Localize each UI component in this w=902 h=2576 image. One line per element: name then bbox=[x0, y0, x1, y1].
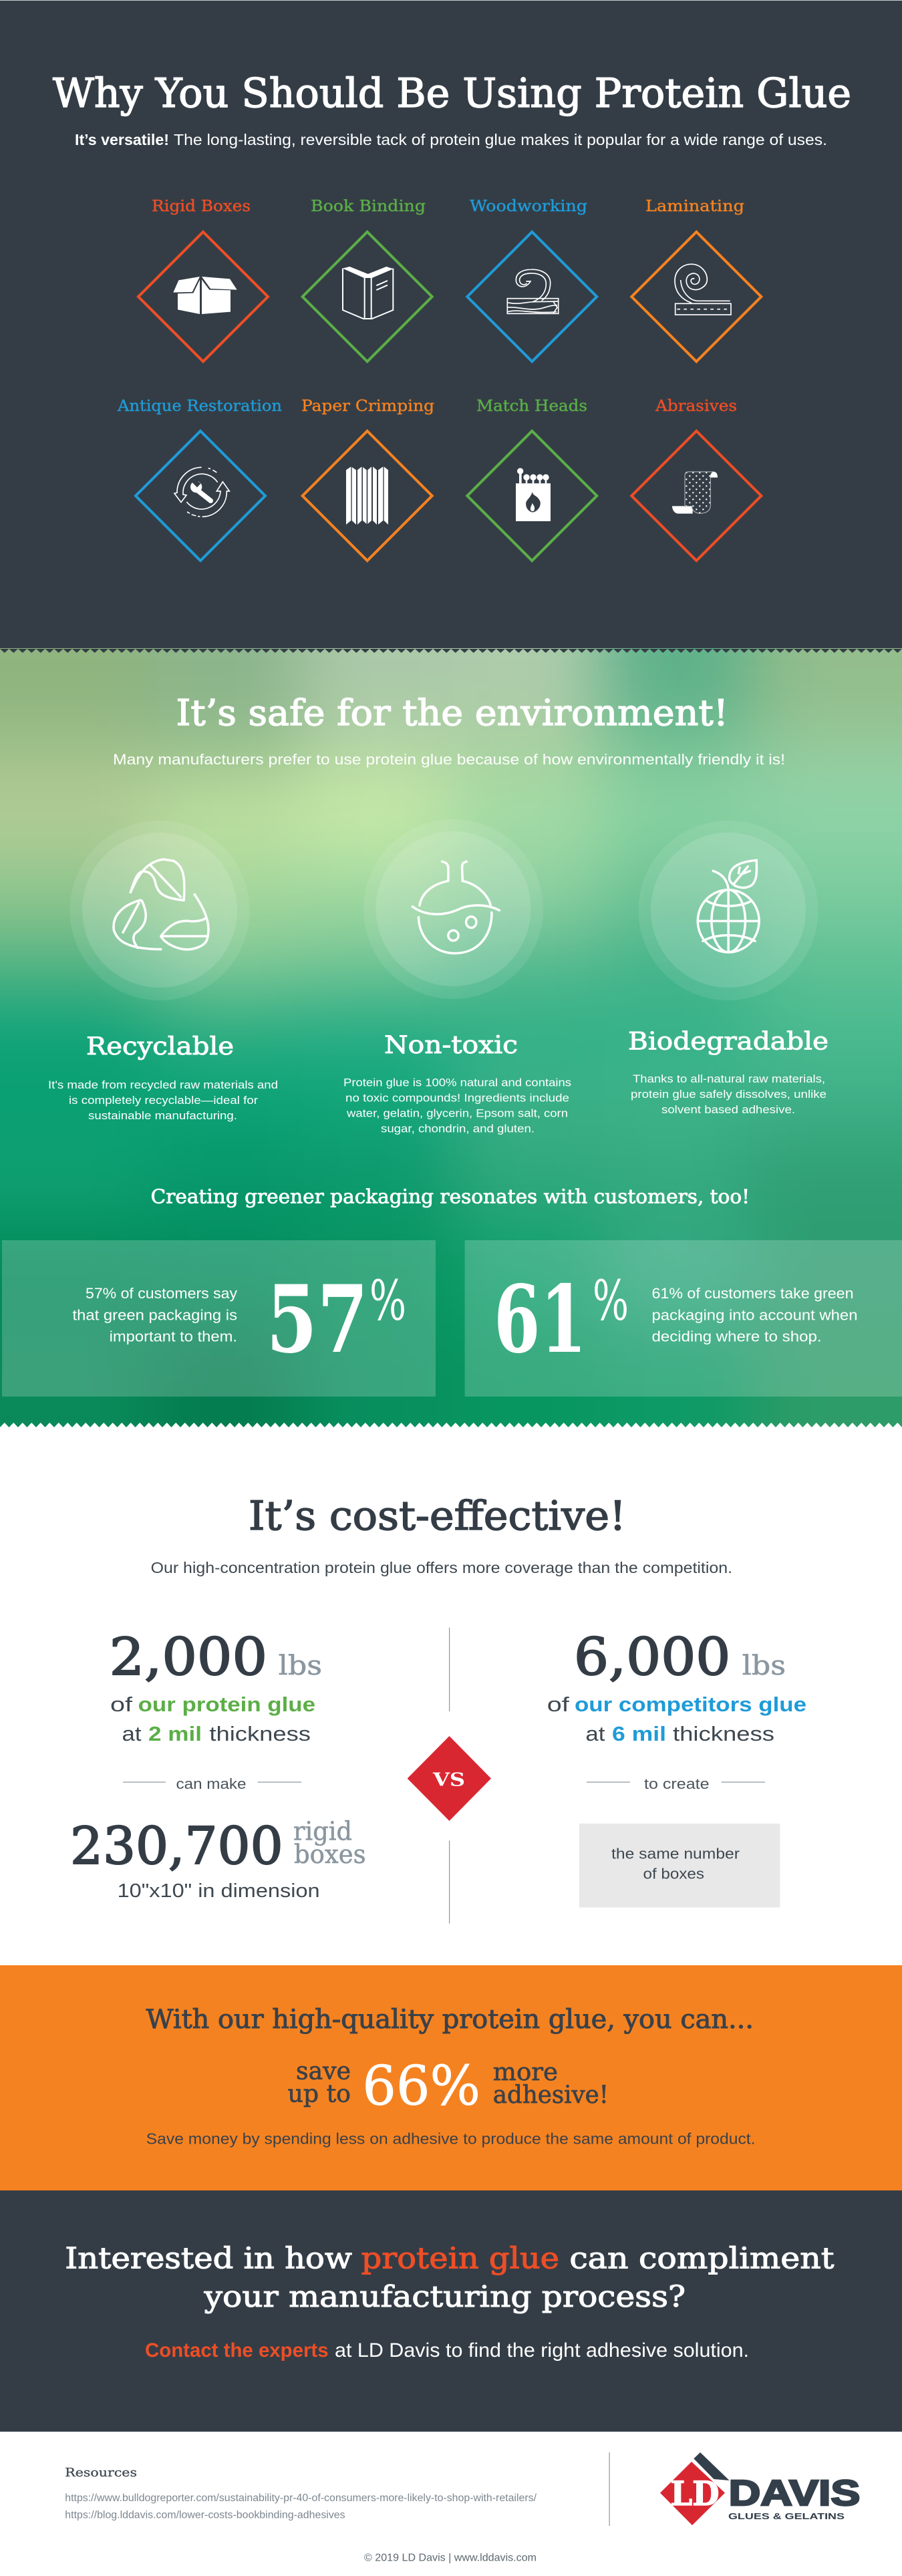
text: non-toxic: no toxic compounds! Ingredients include bbox=[345, 1092, 569, 1104]
stat panel: 61%: packaging into account when bbox=[652, 1307, 858, 1323]
use: book binding bbox=[303, 198, 432, 362]
comparison: competitor glue: thickness bbox=[673, 1722, 774, 1745]
comparison: our glue: 10"x10" in dimension bbox=[118, 1880, 320, 1902]
text: recyclable: is completely recyclable—ideal for bbox=[69, 1094, 258, 1107]
heading: safe for the environment: It’s safe for the environment! bbox=[176, 693, 728, 734]
panel: savings (orange) bbox=[0, 1965, 902, 2190]
subtitle: It’s versatile! bbox=[75, 131, 169, 148]
heading: interested: your manufacturing process? bbox=[203, 2280, 686, 2314]
use: match heads: Match Heads bbox=[476, 398, 587, 415]
heading: interested: can compliment bbox=[569, 2241, 835, 2275]
use: antique restoration bbox=[117, 398, 282, 561]
use: antique restoration: Antique Restoration bbox=[117, 398, 282, 415]
heading: biodegradable: Biodegradable bbox=[628, 1028, 829, 1056]
stat panel: 57%: % bbox=[369, 1270, 406, 1333]
use: abrasives: Abrasives bbox=[655, 398, 737, 415]
stat: save 66%: more bbox=[493, 2059, 558, 2086]
resources: Resources bbox=[65, 2466, 137, 2480]
panel: call to action (dark) bbox=[0, 2190, 902, 2432]
comparison: our glue: thickness bbox=[209, 1722, 311, 1745]
icon: globe with leaf bbox=[698, 860, 759, 952]
icon: open book bbox=[343, 267, 394, 319]
column: recyclable bbox=[48, 821, 278, 1122]
comparison: competitor glue: 6,000 bbox=[574, 1628, 730, 1687]
panel: cost-effective bbox=[0, 1427, 902, 1965]
column: non-toxic bbox=[343, 819, 571, 1135]
heading: greener packaging: Creating greener packaging resonates with customers, too! bbox=[151, 1185, 750, 1208]
badge: vs diamond: VS bbox=[432, 1769, 465, 1790]
use: abrasives bbox=[631, 398, 761, 561]
comparison: competitor glue: at bbox=[585, 1722, 605, 1745]
stat: save 66%: 66% bbox=[362, 2055, 480, 2118]
panel: environment (green blurred section) bbox=[0, 648, 902, 1427]
stat panel: 61% bbox=[465, 1240, 902, 1397]
use: laminating: Laminating bbox=[645, 198, 744, 215]
stat panel: 61%: deciding where to shop. bbox=[652, 1328, 822, 1344]
stat panel: 57%: 57 bbox=[267, 1264, 368, 1374]
panel: versatile (dark header section) bbox=[0, 0, 902, 650]
use: book binding: Book Binding bbox=[311, 198, 426, 215]
comparison: competitor glue: to create bbox=[644, 1775, 710, 1792]
text: biodegradable bbox=[631, 1072, 826, 1116]
icon: wrench and arrows bbox=[174, 467, 229, 517]
stat panel: 57%: important to them. bbox=[110, 1328, 237, 1344]
resources: https://blog.lddavis.com/lower-costs-bookbinding-adhesives bbox=[65, 2509, 345, 2521]
subheading: Our high-concentration protein glue offers more coverage than the competition. bbox=[151, 1559, 732, 1576]
logo: LD Davis: LD bbox=[670, 2474, 720, 2513]
comparison: competitor glue: of boxes bbox=[643, 1866, 704, 1882]
comparison: competitor glue: the same number bbox=[611, 1846, 740, 1862]
text: biodegradable: protein glue safely dissolves, unlike bbox=[631, 1088, 826, 1101]
text: non-toxic: water, gelatin, glycerin, Epsom salt, corn bbox=[346, 1107, 568, 1120]
copyright: © 2019 LD Davis | www.lddavis.com bbox=[364, 2553, 537, 2564]
text: recyclable: sustainable manufacturing. bbox=[88, 1109, 237, 1122]
text: non-toxic: Protein glue is 100% natural and contains bbox=[343, 1076, 571, 1089]
logo: LD Davis bbox=[660, 2452, 860, 2525]
icon: laminate roll bbox=[675, 264, 731, 315]
heading: non-toxic: Non-toxic bbox=[384, 1032, 518, 1059]
panel: footer bbox=[0, 2432, 902, 2576]
text: biodegradable: solvent based adhesive. bbox=[661, 1103, 795, 1116]
icon: open box bbox=[173, 277, 237, 314]
comparison: our glue: 2,000 bbox=[110, 1628, 267, 1687]
text: non-toxic: sugar, chondrin, and gluten. bbox=[381, 1123, 535, 1135]
stat: save 66%: adhesive! bbox=[493, 2082, 609, 2109]
heading: recyclable: Recyclable bbox=[86, 1033, 234, 1060]
use: rigid boxes: Rigid Boxes bbox=[152, 198, 251, 215]
comparison: our glue: can make bbox=[176, 1775, 246, 1792]
panel: savings (orange): With our high-quality protein glue, you can... bbox=[146, 2005, 754, 2035]
icon: recycling leaves bbox=[114, 859, 208, 950]
use: woodworking: Woodworking bbox=[470, 198, 587, 215]
use: paper crimping: Paper Crimping bbox=[301, 398, 434, 415]
title: Why You Should Be Using Protein Glue bbox=[53, 70, 851, 117]
icon: matchbox bbox=[516, 468, 551, 521]
text: recyclable: It's made from recycled raw materials and bbox=[48, 1079, 278, 1091]
comparison: our glue bbox=[70, 1628, 366, 1902]
comparison: our glue: rigid bbox=[293, 1817, 352, 1846]
text: non-toxic bbox=[343, 1076, 571, 1135]
resources: https://www.bulldogreporter.com/sustainability-pr-40-of-consumers-more-likely-to-shop-with-retailers/ bbox=[65, 2492, 537, 2504]
comparison: competitor glue: our competitors glue bbox=[575, 1693, 806, 1716]
icon: crimped paper bbox=[346, 466, 388, 525]
text: contact bbox=[145, 2339, 749, 2362]
comparison: our glue: 230,700 bbox=[70, 1817, 283, 1876]
comparison: our glue: at bbox=[122, 1722, 142, 1745]
heading: cost-effective: It’s cost-effective! bbox=[249, 1493, 626, 1540]
comparison: our glue: boxes bbox=[294, 1840, 366, 1869]
comparison: competitor glue bbox=[547, 1628, 806, 1908]
heading: interested: protein glue bbox=[361, 2241, 559, 2275]
heading: interested: Interested in how bbox=[65, 2241, 352, 2275]
comparison: competitor glue: 6 mil bbox=[612, 1722, 666, 1745]
icon: sandpaper roll bbox=[672, 472, 718, 514]
comparison: our glue: of bbox=[110, 1693, 132, 1716]
use: match heads bbox=[467, 398, 597, 561]
comparison: competitor glue: lbs bbox=[742, 1651, 786, 1681]
subheading: Many manufacturers prefer to use protein glue because of how environmentally friendly it is! bbox=[113, 751, 785, 768]
stat: save 66%: save bbox=[296, 2058, 351, 2086]
comparison: our glue: lbs bbox=[279, 1651, 322, 1681]
text: biodegradable: Thanks to all-natural raw materials, bbox=[633, 1072, 825, 1085]
resources bbox=[65, 2466, 537, 2521]
logo: LD Davis: GLUES & GELATINS bbox=[728, 2511, 845, 2521]
text: contact: Contact the experts bbox=[145, 2339, 329, 2362]
stat: save 66%: up to bbox=[287, 2080, 351, 2108]
icon: wood shaving bbox=[507, 269, 559, 313]
stat panel: 61%: 61 bbox=[494, 1264, 587, 1374]
use: paper crimping bbox=[301, 398, 434, 561]
stat: save 66% bbox=[287, 2055, 609, 2118]
panel: savings (orange): Save money by spending less on adhesive to produce the same amount of product. bbox=[146, 2130, 755, 2148]
comparison: competitor glue: of bbox=[547, 1693, 569, 1716]
stat panel: 57%: 57% of customers say bbox=[86, 1285, 237, 1302]
column: biodegradable bbox=[628, 821, 829, 1116]
comparison: our glue: our protein glue bbox=[138, 1693, 315, 1716]
heading: interested bbox=[65, 2241, 835, 2314]
stat panel: 57%: that green packaging is bbox=[72, 1307, 237, 1323]
stat panel: 57% bbox=[2, 1240, 436, 1397]
badge: vs diamond bbox=[408, 1736, 491, 1821]
subtitle: The long-lasting, reversible tack of protein glue makes it popular for a wide range of uses. bbox=[174, 131, 827, 148]
comparison: our glue: 2 mil bbox=[148, 1722, 202, 1745]
use: woodworking bbox=[467, 198, 597, 362]
icon: flask bbox=[412, 861, 499, 954]
stat panel: 61%: % bbox=[593, 1270, 629, 1333]
text: recyclable bbox=[48, 1079, 278, 1122]
logo: LD Davis: DAVIS bbox=[729, 2474, 860, 2513]
use: laminating bbox=[631, 198, 761, 362]
use: rigid boxes bbox=[138, 198, 268, 362]
stat panel: 61%: 61% of customers take green bbox=[652, 1285, 854, 1302]
text: contact: at LD Davis to find the right adhesive solution. bbox=[335, 2339, 749, 2362]
